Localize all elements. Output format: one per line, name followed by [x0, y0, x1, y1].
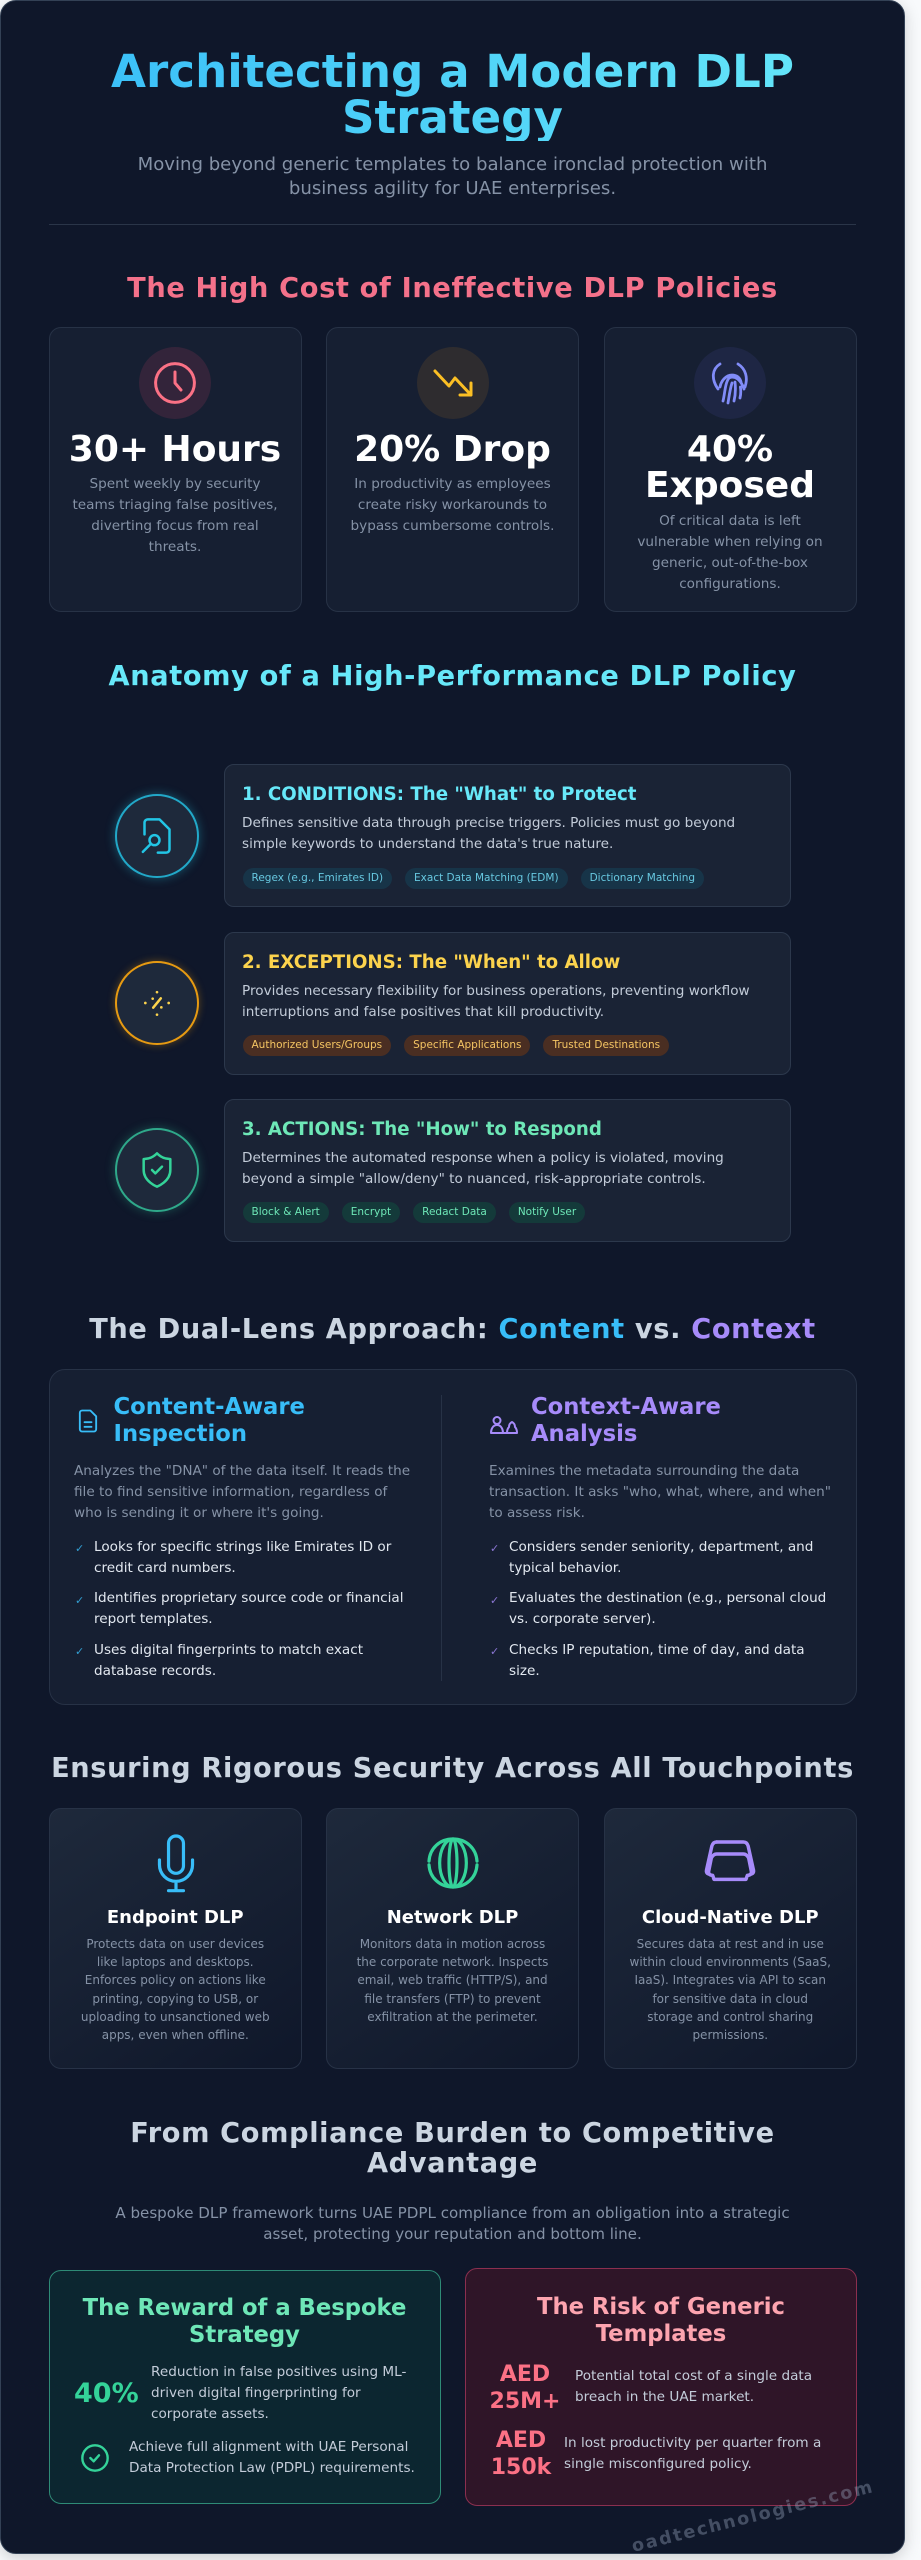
text: context description: transaction. It asks "who, what, where, and when" [489, 1484, 831, 1500]
text: hours description: Spent weekly by security [89, 476, 261, 492]
heading: context aware [531, 1394, 721, 1447]
tags: exceptions: Authorized Users/Groups [252, 1039, 382, 1051]
icon: cloud storage [704, 1840, 756, 1882]
text: endpoint: Enforces policy on actions like [85, 1973, 266, 1987]
text: context description [489, 1462, 831, 1520]
icon: file search [115, 794, 199, 878]
text: network: email, web traffic (HTTP/S), and [357, 1973, 548, 1987]
text: conditions: simple keywords to understand the data's true nature. [242, 836, 613, 852]
icon: clock [139, 347, 211, 419]
heading: conditions: 1. CONDITIONS: The "What" to Protect [242, 784, 636, 805]
text: endpoint: like laptops and desktops. [97, 1955, 254, 1969]
tags: exceptions: Specific Applications [413, 1039, 521, 1051]
tags: conditions: Regex (e.g., Emirates ID) [252, 872, 383, 884]
list: content checks [75, 1542, 84, 1658]
text: actions: beyond a simple "allow/deny" to nuanced, risk-appropriate controls. [242, 1170, 706, 1186]
stat: AED 150k: 150k [491, 2454, 551, 2480]
stat: AED 25M [490, 2362, 560, 2414]
text: exceptions: interruptions and false positives that kill productivity. [242, 1004, 604, 1020]
list: context checks [490, 1542, 499, 1658]
list: context checks: ✓ [490, 1645, 499, 1658]
list: context bullets: size. [509, 1662, 540, 1678]
text: reward stat: corporate assets. [151, 2406, 269, 2422]
text: reward stat [151, 2364, 406, 2422]
text: context description: to assess risk. [489, 1504, 585, 1520]
text: compliance subtitle: asset, protecting your reputation and bottom line. [263, 2225, 642, 2243]
text: cloud: Secures data at rest and in use [637, 1937, 824, 1951]
stat: AED 25M: 25M+ [490, 2388, 560, 2414]
text: network: file transfers (FTP) to prevent [364, 1992, 541, 2006]
text: exposed description: configurations. [679, 576, 781, 592]
list: content bullets: credit card numbers. Identifies proprietary source code or financial [94, 1560, 404, 1606]
text: risk productivity: single misconfigured policy. [564, 2456, 752, 2472]
panel: conditions [224, 764, 791, 907]
text: network [356, 1937, 548, 2024]
text: content description: file to find sensitive information, regardless of [74, 1484, 387, 1500]
list: context bullets: typical behavior. Evaluates the destination (e.g., personal cloud [509, 1560, 826, 1606]
tags: conditions: Exact Data Matching (EDM) [414, 872, 559, 884]
text: content description: who is sending it or where it's going. [74, 1504, 324, 1520]
tags: exceptions [243, 1035, 669, 1056]
panel: stat 40% exposed [604, 327, 856, 612]
text: actions: Determines the automated response when a policy is violated, moving [242, 1150, 724, 1166]
heading: anatomy: Anatomy of a High-Performance DLP Policy [108, 661, 796, 692]
title: Strategy [342, 91, 563, 144]
text: risk productivity: In lost productivity per quarter from a [564, 2435, 821, 2451]
icon: trend down [416, 347, 488, 419]
icon: document [78, 1410, 98, 1432]
text: exposed description [637, 512, 823, 592]
text: actions [242, 1150, 724, 1186]
heading: context aware: Analysis [531, 1421, 637, 1447]
text: reward compliance: Data Protection Law (PDPL) requirements. [129, 2460, 415, 2476]
heading: content aware: Content-Aware [114, 1394, 305, 1420]
text: drop description [351, 476, 554, 534]
text: network: Monitors data in motion across [360, 1937, 545, 1951]
stat: AED 25M: AED [500, 2362, 550, 2386]
list: content bullets: report templates. Uses digital fingerprints to match exact [94, 1611, 363, 1658]
list: context checks: ✓ [490, 1542, 499, 1555]
panel: stat 20% drop [326, 327, 579, 612]
list: content bullets: database records. [94, 1662, 216, 1678]
list: content bullets [94, 1538, 404, 1678]
heading: compliance [130, 2118, 775, 2179]
list: context checks: ✓ [490, 1594, 499, 1606]
text: reward compliance: Achieve full alignment with UAE Personal [129, 2439, 408, 2455]
text: reward stat: Reduction in false positives using ML- [151, 2364, 406, 2380]
tags: actions: Notify User [518, 1206, 576, 1218]
heading: risk: The Risk of Generic [537, 2294, 785, 2320]
list: context bullets [509, 1538, 826, 1678]
heading: reward: The Reward of a Bespoke [83, 2294, 406, 2320]
heading: content aware: Inspection [114, 1421, 247, 1447]
subtitle: business agility for UAE enterprises. [289, 178, 616, 199]
text: endpoint: uploading to unsanctioned web [81, 2010, 270, 2024]
heading: actions: 3. ACTIONS: The "How" to Respond [242, 1119, 602, 1140]
panel: stat 30+ hours [49, 327, 302, 612]
subtitle [138, 154, 767, 199]
list: content bullets: Looks for specific strings like Emirates ID or [94, 1538, 391, 1554]
panel: exceptions [224, 932, 791, 1075]
icon: globe [427, 1837, 479, 1889]
text: cloud: within cloud environments (SaaS, [630, 1955, 831, 1969]
panel: network [326, 1808, 579, 2069]
stat: 40% exposed: Exposed [645, 465, 815, 506]
text: risk cost: breach in the UAE market. [575, 2389, 754, 2405]
text: drop description: bypass cumbersome controls. [351, 518, 554, 534]
text: cloud: IaaS). Integrates via API to scan [634, 1973, 826, 1987]
text: exposed description: vulnerable when relying on [637, 534, 823, 550]
text: exposed description: generic, out-of-the-box [652, 554, 808, 570]
text: cloud: permissions. [692, 2028, 768, 2042]
text: compliance subtitle [115, 2204, 790, 2243]
tags: actions [243, 1202, 585, 1223]
heading: compliance: From Compliance Burden to Competitive [130, 2118, 775, 2149]
tags: actions: Block & Alert [252, 1206, 320, 1218]
text: endpoint [81, 1937, 270, 2042]
heading: dual lens: The Dual-Lens Approach: Content vs. Context [89, 1314, 816, 1345]
text: cloud: storage and control sharing [647, 2010, 813, 2024]
icon: users [490, 1416, 518, 1434]
text: compliance subtitle: A bespoke DLP framework turns UAE PDPL compliance from an obligation into a strategic [115, 2204, 790, 2222]
stat: 20% drop: 20% Drop [354, 429, 551, 470]
text: hours description: diverting focus from real [91, 518, 259, 534]
text: risk cost [575, 2368, 812, 2405]
heading: reward: Strategy [189, 2322, 300, 2348]
heading: content aware [114, 1394, 305, 1447]
stat: 40% exposed [645, 429, 815, 506]
icon: fingerprint [694, 347, 766, 419]
title: Architecting a Modern DLP [111, 45, 794, 98]
heading: exceptions: 2. EXCEPTIONS: The "When" to Allow [242, 952, 620, 973]
tags: actions: Redact Data [422, 1206, 487, 1218]
text: cloud [630, 1937, 831, 2042]
panel: dual lens [49, 1369, 856, 1705]
stat: AED 150k: AED [496, 2428, 546, 2452]
tags: actions: Encrypt [351, 1206, 391, 1218]
panel: cloud [604, 1808, 856, 2069]
text: conditions: Defines sensitive data through precise triggers. Policies must go beyond [242, 814, 735, 830]
text: endpoint: Protects data on user devices [86, 1937, 264, 1951]
text: content description: Analyzes the "DNA" of the data itself. It reads the [74, 1462, 410, 1478]
text: endpoint: apps, even when offline. [102, 2028, 249, 2042]
text: risk cost: Potential total cost of a single data [575, 2368, 812, 2384]
heading: risk: Templates [596, 2321, 726, 2347]
heading: risk [537, 2294, 785, 2347]
heading: context aware: Context-Aware [531, 1394, 721, 1420]
stat: 30+ hours: 30+ Hours [69, 429, 281, 470]
heading: reward [82, 2294, 406, 2348]
text: exposed description: Of critical data is left [659, 512, 801, 528]
text: reward compliance [129, 2439, 415, 2476]
panel: risk [465, 2268, 857, 2506]
heading: high cost: The High Cost of Ineffective DLP Policies [127, 273, 778, 304]
text: risk productivity [564, 2435, 821, 2472]
list: content checks: ✓ [75, 1542, 84, 1555]
heading: endpoint: Endpoint DLP [107, 1907, 244, 1928]
text: exceptions: Provides necessary flexibility for business operations, preventing workflow [242, 982, 750, 998]
list: content checks: ✓ [75, 1645, 84, 1658]
heading: touchpoints: Ensuring Rigorous Security Across All Touchpoints [51, 1753, 854, 1784]
text: cloud: for sensitive data in cloud [652, 1992, 808, 2006]
list: content checks: ✓ [75, 1594, 84, 1606]
icon: shield check [115, 1128, 199, 1212]
tags: conditions: Dictionary Matching [590, 872, 695, 884]
text: drop description: In productivity as employees [354, 476, 551, 492]
icon: microphone [158, 1834, 194, 1892]
text: exceptions [242, 982, 750, 1020]
text: hours description: teams triaging false positives, [72, 496, 278, 512]
text: hours description: threats. [149, 538, 201, 554]
panel: actions [224, 1099, 791, 1242]
text: network: exfiltration at the perimeter. [367, 2010, 538, 2024]
heading: compliance: Advantage [367, 2148, 538, 2179]
text: network: the corporate network. Inspects [357, 1955, 548, 1969]
text: drop description: create risky workarounds to [358, 496, 547, 512]
panel: reward [49, 2270, 440, 2504]
panel: endpoint [49, 1808, 302, 2069]
text: hours description [72, 476, 278, 554]
icon: check circle [81, 2444, 109, 2472]
list: context bullets: vs. corporate server). Checks IP reputation, time of day, and data [509, 1611, 805, 1658]
watermark: oadtechnologies.com [630, 2477, 876, 2557]
title [49, 49, 856, 141]
tags: conditions [243, 868, 704, 889]
text: conditions [242, 814, 735, 852]
stat: AED 150k [491, 2428, 552, 2480]
text: endpoint: printing, copying to USB, or [92, 1992, 258, 2006]
text: reward stat: driven digital fingerprinting for [151, 2385, 361, 2401]
tags: exceptions: Trusted Destinations [552, 1039, 660, 1051]
list: context bullets: Considers sender seniority, department, and [509, 1538, 813, 1554]
text: context description: Examines the metadata surrounding the data [489, 1462, 799, 1478]
heading: network: Network DLP [387, 1907, 518, 1928]
heading: cloud: Cloud-Native DLP [642, 1907, 819, 1928]
stat: 40 percent: 40% [74, 2378, 139, 2408]
icon: sparkle slash [115, 961, 199, 1045]
subtitle: Moving beyond generic templates to balance ironclad protection with [138, 154, 767, 174]
text: content description [74, 1462, 410, 1520]
stat: 40% exposed: 40% [687, 429, 773, 470]
